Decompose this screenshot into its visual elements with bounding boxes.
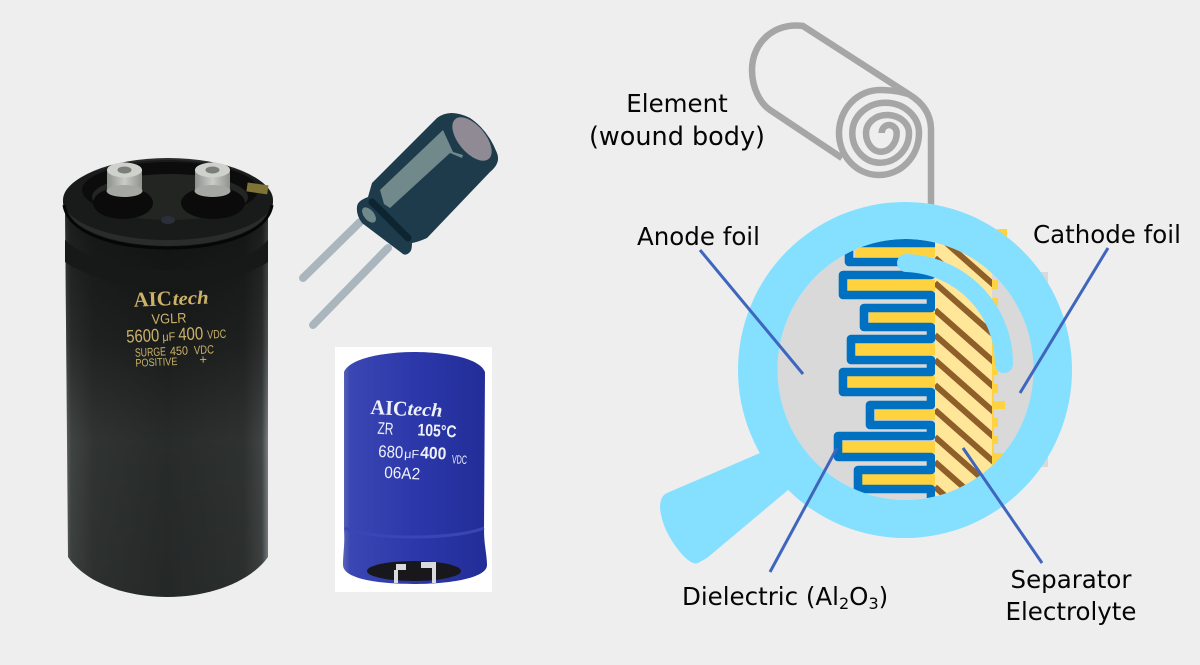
curved inner foil	[906, 263, 1004, 364]
white photo backing	[335, 347, 492, 592]
label: separator and electrolyte: Electrolyte	[1006, 597, 1136, 626]
label: element: (wound body)	[589, 122, 765, 152]
black capacitor printed label: tech	[172, 288, 209, 310]
black capacitor printed label: 5600	[126, 325, 160, 347]
label: dielectric: 3	[868, 594, 879, 613]
leader lines	[700, 248, 1108, 572]
illustration: wound element roll	[752, 25, 931, 206]
label: anode foil: Anode foil	[637, 222, 760, 251]
photo: blue capacitor	[335, 347, 492, 592]
black capacitor printed label: +	[199, 352, 207, 367]
black capacitor printed label: SURGE	[135, 344, 166, 360]
blue capacitor printed label	[367, 395, 470, 486]
stray layer edges	[1030, 272, 1048, 467]
label: cathode foil: Cathode foil	[1033, 220, 1181, 249]
photo: large black capacitor	[63, 158, 273, 597]
center vent	[161, 216, 175, 224]
black capacitor printed label: 400	[178, 323, 204, 344]
black capacitor recess	[82, 162, 258, 218]
separator hatch	[935, 242, 992, 496]
label: dielectric: Dielectric (Al	[682, 582, 839, 611]
black capacitor printed label: VDC	[194, 342, 214, 357]
reflection	[380, 130, 463, 208]
blue capacitor body	[343, 352, 487, 584]
label: dielectric: 2	[839, 594, 849, 613]
label: element: Element	[626, 89, 728, 118]
blue capacitor printed label: 06A2	[384, 464, 421, 484]
anode foil yellow layers	[842, 247, 935, 485]
pins	[394, 562, 436, 583]
blue capacitor printed label: 105°C	[417, 420, 457, 441]
blue capacitor printed label: VDC	[452, 452, 468, 467]
capacitor body	[357, 113, 498, 255]
black capacitor printed label: VDC	[207, 327, 227, 342]
magnifier ring	[738, 202, 1072, 538]
blue capacitor printed label: 680	[378, 442, 404, 462]
flange highlight	[359, 205, 379, 225]
gray interior	[778, 239, 1034, 500]
blue capacitor printed label: 400	[420, 443, 447, 463]
blue capacitor printed label: AIC	[370, 395, 408, 421]
label: dielectric: O	[849, 582, 868, 611]
top face	[445, 110, 499, 168]
blue capacitor printed label: μF	[404, 447, 420, 462]
blue capacitor printed label: tech	[407, 399, 443, 422]
black capacitor printed label: 450	[170, 343, 188, 358]
label: dielectric: )	[879, 582, 888, 611]
blue capacitor printed label: ZR	[377, 419, 394, 439]
cathode teeth	[992, 280, 1005, 465]
black capacitor body	[65, 205, 268, 597]
dark band	[372, 202, 408, 238]
black capacitor printed label: μF	[162, 330, 176, 344]
black capacitor top face	[63, 158, 273, 246]
foil roll outline with tail	[752, 25, 931, 206]
groove	[345, 528, 484, 537]
terminal left	[93, 162, 153, 219]
dielectric outline	[838, 243, 935, 510]
label: separator and electrolyte: Separator	[1011, 565, 1132, 594]
magnified cross-section	[660, 202, 1072, 564]
black capacitor printed label: VGLR	[151, 309, 187, 327]
black capacitor printed label: POSITIVE	[135, 356, 178, 370]
illustration: small radial capacitor	[303, 110, 499, 325]
black capacitor printed label	[124, 284, 228, 370]
terminal right	[181, 162, 245, 219]
magnifier handle	[660, 450, 795, 564]
black capacitor printed label: AIC	[133, 286, 172, 312]
black capacitor crimp groove	[65, 240, 268, 288]
lead wires	[303, 222, 388, 325]
gold band	[246, 183, 268, 194]
bottom opening	[367, 561, 461, 581]
spiral	[839, 90, 919, 175]
